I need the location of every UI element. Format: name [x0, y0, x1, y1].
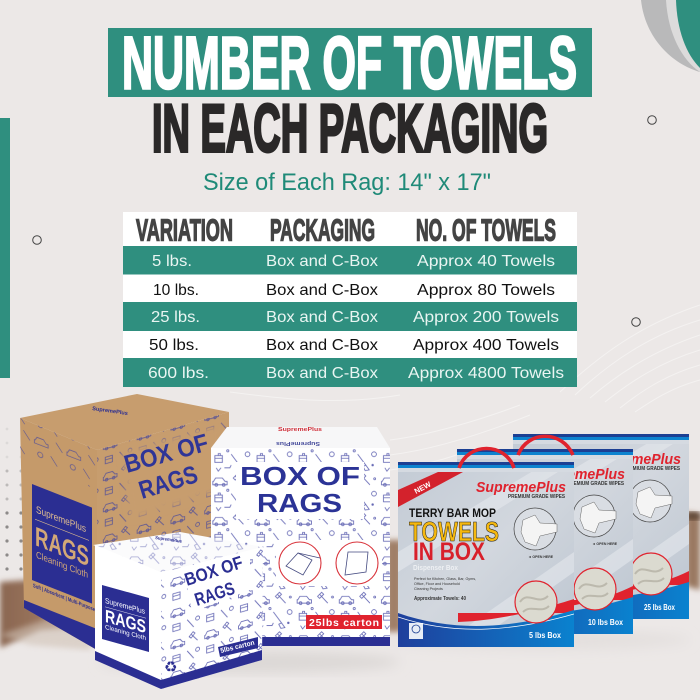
white carton lettering — [240, 461, 360, 518]
table — [123, 212, 577, 387]
row 600 lbs — [148, 365, 564, 382]
new ribbon — [398, 472, 463, 507]
row 25 lbs: 25 lbs. — [151, 309, 200, 326]
box shadows — [100, 630, 690, 673]
small ring markers — [33, 116, 656, 326]
dispenser box 10 lbs — [457, 449, 633, 634]
row 600 lbs: Box and C-Box — [266, 365, 378, 382]
row 600 lbs: 600 lbs. — [148, 365, 209, 382]
row 10 lbs: 10 lbs. — [153, 282, 199, 299]
small carton side panel — [102, 585, 149, 652]
dispenser box 5 lbs: ◄ OPEN HERE — [528, 555, 554, 559]
dispenser box 25 lbs: SupremePlus — [591, 451, 681, 468]
product description: Office, Floor and Household — [414, 582, 460, 586]
usage circles — [279, 542, 378, 584]
product description — [414, 577, 476, 591]
carton side tagline: Soft | Absorbent | Multi-Purpose — [33, 583, 95, 613]
product description: Perfect for Kitchen, Glass, Bar, Gyms, — [414, 577, 476, 581]
faint background lines — [230, 305, 700, 470]
white carton lettering: RAGS — [257, 488, 342, 518]
product title: TERRY BAR MOP — [409, 506, 496, 520]
small carton side panel: Cleaning Cloth — [105, 624, 146, 642]
flap logo: SupremePlus — [276, 440, 320, 446]
product description: Cleaning Projects — [414, 587, 443, 591]
white carton lettering: BOX OF — [240, 461, 360, 491]
carton side panel: RAGS — [35, 521, 89, 572]
new ribbon: NEW — [413, 479, 433, 496]
dispenser box 10 lbs: SupremePlus — [535, 466, 625, 483]
size note: Size of Each Rag: 14" x 17" — [203, 169, 491, 196]
usage circle — [514, 508, 557, 550]
carton side panel — [32, 484, 92, 604]
dot grid — [5, 428, 23, 571]
icon: recycle: ♻ — [164, 658, 177, 676]
small carton side panel: SupremePlus — [105, 596, 145, 616]
dispenser box 10 lbs: PREMIUM GRADE WIPES — [567, 481, 625, 487]
row 50 lbs: Box and C-Box — [266, 337, 378, 354]
row 5 lbs — [152, 253, 555, 270]
table header: VARIATION — [136, 214, 233, 248]
row 5 lbs: 5 lbs. — [152, 253, 192, 270]
dispenser box 5 lbs: PREMIUM GRADE WIPES — [508, 494, 566, 500]
row 50 lbs — [149, 337, 559, 354]
25lbs label: 25lbs carton — [309, 617, 379, 629]
small carton side panel: RAGS — [105, 605, 146, 637]
brand: SupremePlus — [476, 479, 566, 496]
carton box of rags lettering: BOX OF — [121, 429, 211, 479]
dispenser box 25 lbs: PREMIUM GRADE WIPES — [623, 466, 681, 472]
row 5 lbs: Approx 40 Towels — [417, 253, 555, 270]
left teal accent bar — [0, 118, 10, 378]
dispenser box 10 lbs: 10 lbs Box — [588, 618, 623, 627]
small carton 5lbs — [93, 532, 263, 689]
dispenser box 5 lbs: Dispenser Box — [413, 565, 458, 572]
row 25 lbs: Approx 200 Towels — [413, 309, 559, 326]
table header: PACKAGING — [270, 214, 375, 248]
towel photo circle — [515, 581, 557, 623]
carton side panel: Cleaning Cloth — [36, 550, 88, 581]
carton side panel: SupremePlus — [36, 505, 86, 535]
white carton 25lbs — [211, 427, 390, 646]
handle front — [459, 448, 514, 468]
small carton lettering: RAGS — [192, 578, 237, 610]
row 10 lbs: Approx 80 Towels — [417, 282, 555, 299]
dispenser box 10 lbs: ◄ OPEN HERE — [592, 542, 618, 546]
carton box of rags lettering: RAGS — [136, 460, 201, 505]
dispenser box 5 lbs — [398, 462, 574, 647]
cardboard carton — [20, 394, 229, 650]
row 600 lbs: Approx 4800 Towels — [408, 365, 564, 382]
row 5 lbs: Box and C-Box — [266, 253, 378, 270]
wood surface — [0, 512, 700, 650]
row 25 lbs: Box and C-Box — [266, 309, 378, 326]
row 50 lbs: 50 lbs. — [149, 337, 199, 354]
dispenser box 5 lbs: TOWELS — [409, 516, 499, 547]
small carton top label: SupremePlus — [155, 535, 183, 544]
row 25 lbs — [151, 309, 559, 326]
table header: NO. OF TOWELS — [416, 214, 556, 248]
carton top label: SupremePlus — [92, 406, 128, 417]
table header — [136, 214, 556, 248]
dispenser box 5 lbs: IN BOX — [413, 538, 485, 566]
dispenser box 25 lbs — [513, 434, 689, 619]
row 50 lbs: Approx 400 Towels — [413, 337, 559, 354]
dispenser box 25 lbs: 25 lbs Box — [644, 603, 675, 612]
small carton lettering: BOX OF — [182, 552, 245, 590]
5lbs label: 5lbs carton — [220, 640, 255, 655]
small carton lettering — [182, 552, 245, 610]
certification logo — [409, 623, 423, 639]
dispenser box 5 lbs: Approximate Towels: 40 — [414, 596, 466, 602]
carton box of rags lettering — [121, 424, 222, 520]
flap logo — [276, 427, 322, 446]
handle back — [518, 436, 573, 455]
decorative swoosh top right — [641, 0, 700, 72]
row 10 lbs: Box and C-Box — [266, 282, 378, 299]
dispenser box 5 lbs: 5 lbs Box — [529, 631, 561, 640]
row 10 lbs — [153, 282, 555, 299]
flap logo: SupremePlus — [278, 427, 322, 433]
